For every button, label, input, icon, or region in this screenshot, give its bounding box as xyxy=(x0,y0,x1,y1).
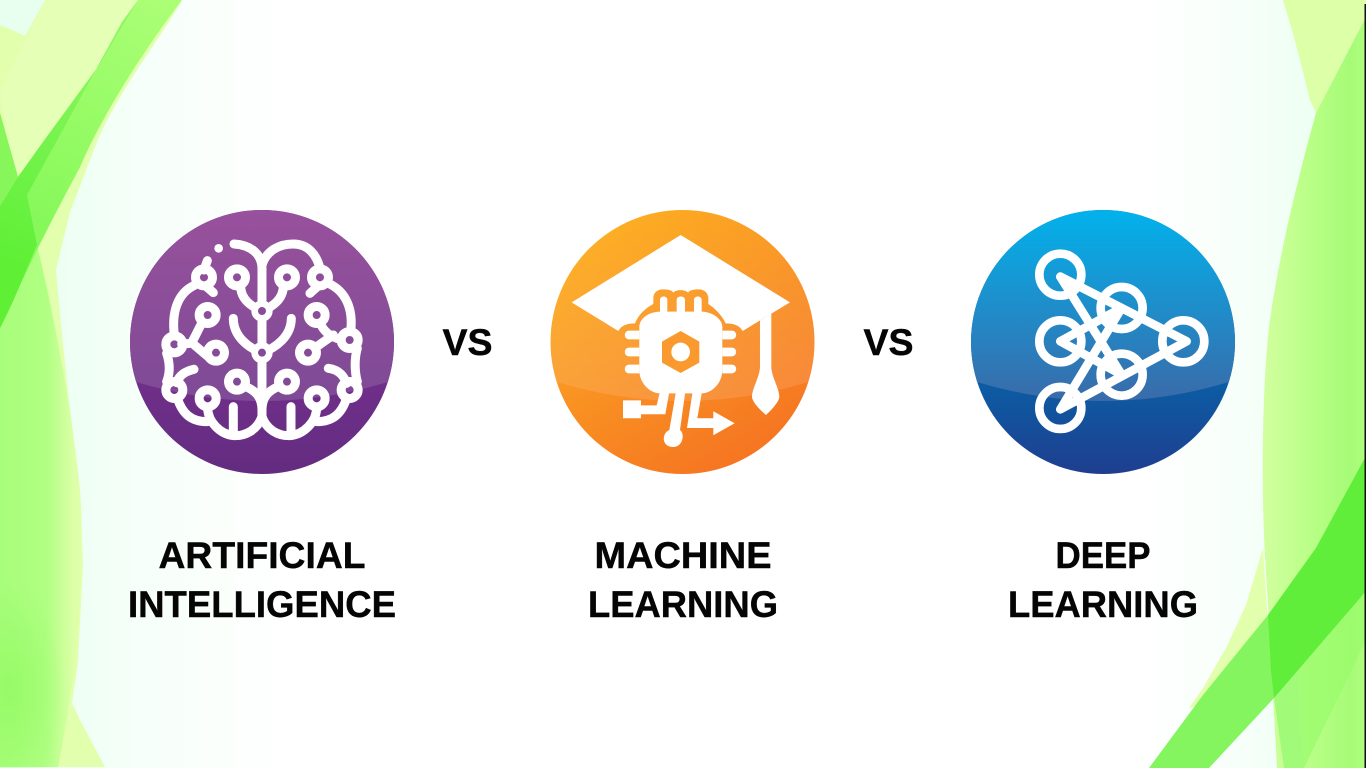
icon: orange graduation cap circle xyxy=(550,210,814,474)
heading: machine: MACHINE xyxy=(594,535,772,576)
background: left green waves xyxy=(0,0,182,768)
panel: artificial intelligence xyxy=(130,210,394,576)
panel: deep learning xyxy=(971,210,1235,576)
icon: blue neural network circle xyxy=(971,210,1235,474)
heading: artificial: ARTIFICIAL xyxy=(158,535,366,576)
label: first vs: VS xyxy=(442,322,492,363)
heading: learning (machine): LEARNING xyxy=(588,584,778,625)
background: right green waves xyxy=(1149,0,1366,768)
heading: intelligence: INTELLIGENCE xyxy=(128,584,396,625)
heading: learning (deep): LEARNING xyxy=(1008,584,1198,625)
panel: machine learning xyxy=(550,210,814,576)
cap board with chip outline cut away xyxy=(572,235,790,331)
icon: purple brain circle xyxy=(130,210,394,474)
heading: deep: DEEP xyxy=(1056,535,1150,576)
label: second vs: VS xyxy=(864,322,914,363)
